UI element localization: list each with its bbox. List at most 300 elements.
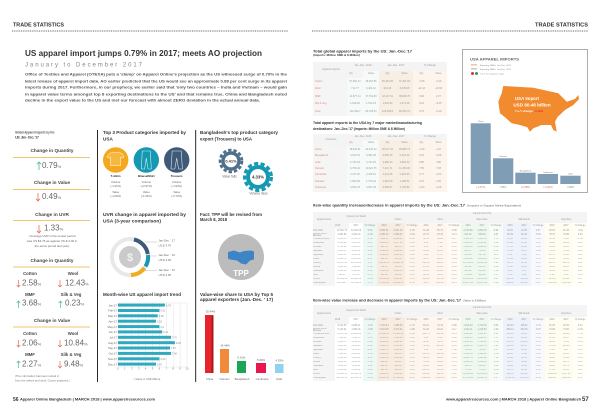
table: total global apparel imports: 56,194.05 bbox=[382, 80, 393, 82]
footer: right: 57 bbox=[582, 397, 589, 403]
axis labels: 10 bbox=[186, 366, 189, 370]
table: value by item: 220.48 bbox=[507, 345, 514, 347]
intro text: imports during 2017. Furthermore, in our prophecy, we earlier said that 'only two countries – India and Vietnam – would gain bbox=[25, 86, 287, 90]
category labels: Blouse/Shirt bbox=[138, 174, 155, 178]
table: value by item: -8.19 bbox=[535, 365, 541, 367]
table: quantity by item: 13,861.20 bbox=[463, 278, 473, 280]
table: value by item: -4.61 bbox=[409, 373, 415, 375]
source note: (The information has been sorted in bbox=[15, 374, 60, 378]
table: quantity by item: 1.25 bbox=[368, 242, 372, 244]
table: value by item: Total apparel bbox=[313, 377, 326, 379]
table: value by item: 2,142.60 bbox=[464, 337, 472, 339]
table: quantity by item: 0.65 bbox=[578, 234, 582, 236]
table: value by item: 7,520.18 bbox=[338, 337, 346, 339]
table: quantity by item: 14.60 bbox=[507, 258, 513, 260]
table: exports by destination: 29,194.12 bbox=[365, 148, 377, 151]
table: quantity by item: -6.83 bbox=[535, 246, 541, 248]
table: value by item: 28.14 bbox=[521, 369, 527, 371]
table: value by item: 51.32 bbox=[563, 357, 569, 359]
table: quantity by item: 6,838.12 bbox=[394, 238, 402, 240]
table: quantity by item: 641.22 bbox=[465, 234, 472, 236]
table: exports by destination: Jan.-Dec. 2017 bbox=[388, 135, 404, 138]
footer: left: 56 bbox=[13, 397, 19, 403]
table: quantity by item: 0.26 bbox=[536, 282, 540, 284]
table: quantity by item: 6,912.05 bbox=[380, 242, 388, 244]
table: quantity by item: 141.30 bbox=[381, 274, 388, 276]
table: quantity by item: 2,092.66 bbox=[478, 246, 486, 248]
table: value by item: 9.67 bbox=[564, 349, 568, 351]
country bar labels bbox=[478, 121, 574, 176]
table: value by item: Others bbox=[313, 373, 320, 375]
table: value by item: Silk blends bbox=[518, 313, 530, 315]
table: quantity by item: Underwear bbox=[313, 242, 324, 244]
table: total global apparel imports: % Change bbox=[424, 64, 436, 67]
table: quantity by item: 1,612.40 bbox=[478, 258, 486, 260]
table: quantity by item: 9,641.24 bbox=[394, 230, 402, 232]
table: value by item: % Change bbox=[449, 319, 459, 321]
table: value by item: 3,035.05 bbox=[436, 377, 444, 379]
table: value by item: -1.66 bbox=[493, 341, 499, 343]
table: value by item: 91.03 bbox=[549, 325, 555, 327]
table: quantity by item: 2.78 bbox=[536, 262, 540, 264]
table: quantity by item: % Change bbox=[407, 225, 417, 227]
month labels: Oct-17 bbox=[109, 352, 117, 356]
table: total global apparel imports: 0.79 bbox=[419, 110, 424, 112]
table: value by item: 5,248.60 bbox=[352, 345, 360, 347]
infographic title: USA APPAREL IMPORTS bbox=[470, 58, 520, 62]
category labels: (-1.91%) bbox=[110, 184, 121, 188]
table: value by item: 1.26 bbox=[578, 349, 582, 351]
table: quantity by item: 81.32 bbox=[563, 230, 569, 232]
table: quantity by item: 1,288.40 bbox=[394, 250, 402, 252]
table: quantity by item: 12.0 bbox=[536, 278, 540, 280]
table: quantity by item: 2017 bbox=[563, 225, 569, 227]
table: value by item: Cotton bbox=[395, 313, 401, 315]
table: value by item: -7.14 bbox=[451, 369, 457, 371]
table: value by item: 1,614.53 bbox=[464, 325, 472, 327]
heading: value table: (Value in $ Million) bbox=[463, 298, 486, 302]
table: exports by destination: 7,214.71 bbox=[383, 167, 392, 170]
heading: table 1: (Imports: Million SME & $ Million) bbox=[313, 53, 360, 57]
table: exports by destination: Qty bbox=[420, 141, 423, 144]
table: quantity by item: -5.18 bbox=[535, 238, 541, 240]
table: quantity by item: 2016 bbox=[549, 225, 555, 227]
table: value by item: -12.2 bbox=[451, 365, 457, 367]
table: value by item: -4.48 bbox=[367, 369, 373, 371]
table: value by item: -5.26 bbox=[409, 341, 415, 343]
table: value by item: -2.73 bbox=[535, 325, 541, 327]
table: value by item: 9,086.41 bbox=[352, 325, 360, 327]
table: value by item: 0.10 bbox=[578, 377, 582, 379]
category labels: T-shirts bbox=[111, 174, 121, 178]
table: value by item: 62.84 bbox=[521, 337, 527, 339]
table: quantity by item: 2016 bbox=[381, 225, 387, 227]
table: quantity by item: 0.50 bbox=[368, 230, 372, 232]
table: value by item: 714.25 bbox=[423, 345, 430, 347]
table: value by item: 10,112.40 bbox=[463, 373, 473, 375]
table: quantity by item: -2.29 bbox=[367, 234, 373, 236]
table: value by item: -11.7 bbox=[451, 329, 457, 331]
table: quantity by item: 9,236.18 bbox=[338, 242, 346, 244]
table: value by item: 48.72 bbox=[563, 365, 569, 367]
table: quantity by item: -12.7 bbox=[451, 238, 457, 240]
table: quantity by item: -0.38 bbox=[409, 254, 415, 256]
bar values: 6.02 bbox=[160, 310, 166, 313]
table: value by item: 7,212.64 bbox=[380, 325, 388, 327]
table: value by item: % Change bbox=[491, 319, 501, 321]
table: value by item: 262.30 bbox=[521, 329, 528, 331]
table: value by item: -4.76 bbox=[409, 353, 415, 355]
map label: Y-o-Y change: -0.49% bbox=[515, 109, 544, 113]
source note: from the values and wool, Cotton analyzed.) bbox=[15, 378, 70, 382]
axis labels: 5 bbox=[152, 366, 154, 370]
table: quantity by item: 2,193.80 bbox=[352, 270, 360, 272]
heading: value table: Item-wise value increase and decrease in apparel imports by the US: Jan.-Dec.'17 bbox=[313, 298, 461, 302]
table: quantity by item: 3,481.82 bbox=[338, 234, 346, 236]
value change by fibre: Cotton bbox=[23, 331, 37, 336]
table: value by item: 56.40 bbox=[437, 365, 443, 367]
table: quantity by item: % Change bbox=[491, 225, 501, 227]
table: value by item: -11.2 bbox=[451, 373, 457, 375]
table: quantity by item: -3.76 bbox=[367, 274, 373, 276]
quantity change by fibre: 3.68% bbox=[22, 298, 42, 308]
table: value by item: -0.41 bbox=[367, 325, 373, 327]
table: value by item: 6.03 bbox=[494, 365, 498, 367]
table: quantity by item: 30,317.90 bbox=[337, 262, 347, 264]
table: value by item: -1.10 bbox=[578, 337, 583, 339]
table: value by item: 0.91 bbox=[410, 365, 414, 367]
table: quantity by item: 55.73 bbox=[437, 230, 443, 232]
table: exports by destination: -0.58 bbox=[436, 154, 441, 157]
table: value by item: 5.94 bbox=[494, 345, 498, 347]
table: quantity by item: -2.58 bbox=[409, 282, 415, 284]
table: total global apparel imports: 624.18 bbox=[384, 87, 391, 90]
table: quantity by item: 3.18 bbox=[438, 242, 442, 244]
table: quantity by item: 2016 bbox=[423, 225, 429, 227]
month labels: Mar-17 bbox=[108, 314, 117, 318]
table: value by item: -2.93 bbox=[409, 361, 415, 363]
table: value by item: 1,141.52 bbox=[394, 341, 402, 343]
table: quantity by item: 79.38 bbox=[563, 238, 569, 240]
table: quantity by item: -10.2 bbox=[451, 270, 457, 272]
table: quantity by item: 2,142.55 bbox=[338, 270, 346, 272]
table: quantity by item: 56,194.05 bbox=[393, 282, 403, 284]
heading: quantity table bbox=[313, 204, 521, 208]
table: value by item: 2,318.41 bbox=[394, 345, 402, 347]
table: quantity by item: 16,240.53 bbox=[379, 262, 389, 264]
table: quantity by item: 43,417.61 bbox=[477, 282, 487, 284]
heading bbox=[103, 212, 186, 223]
table: exports by destination: 4,847.29 bbox=[366, 186, 376, 189]
table: quantity by item: % Change bbox=[449, 225, 459, 227]
table: quantity by item: 2017 bbox=[521, 225, 527, 227]
table: quantity by item: 2,204.53 bbox=[464, 242, 472, 244]
icon: jeans bbox=[134, 147, 159, 173]
table: quantity by item: -12.2 bbox=[451, 242, 457, 244]
heading: table 2: Total apparel exports to the USA by 7 major market/manufacturing bbox=[313, 121, 423, 125]
bar values bbox=[157, 304, 181, 366]
table: exports by destination: Bangladesh bbox=[315, 154, 328, 157]
orange rules bbox=[13, 158, 90, 327]
table: quantity by item: 8,692.53 bbox=[338, 238, 346, 240]
table: exports by destination: 5,361.22 bbox=[400, 154, 409, 157]
table: quantity by item: 16,018.12 bbox=[393, 262, 403, 264]
table: quantity by item: Knit shirts bbox=[313, 230, 323, 232]
table: value by item: 42.18 bbox=[423, 341, 429, 343]
table: quantity by item: -9.35 bbox=[451, 230, 457, 232]
table: value by item: 982.14 bbox=[381, 365, 388, 367]
table: quantity by item: -2.81 bbox=[409, 266, 415, 268]
table: quantity by item: Nightwear bbox=[313, 254, 323, 256]
table: total global apparel imports: 38,638.76 bbox=[399, 94, 410, 98]
table: value by item: 103.84 bbox=[507, 333, 514, 335]
table: value by item: 91.25 bbox=[563, 325, 569, 327]
quantity change by fibre: Silk & Veg bbox=[61, 292, 82, 297]
table: value by item: 50.88 bbox=[521, 361, 527, 363]
panel heading: US: Jan.- Dec. '17 bbox=[15, 136, 39, 140]
table: value by item: 1,712.40 bbox=[478, 325, 486, 327]
table: value by item: 4.88 bbox=[438, 337, 442, 339]
heading bbox=[200, 212, 262, 222]
country bar changes: 4.58% bbox=[567, 186, 575, 189]
table: value by item: -7.32 bbox=[451, 349, 457, 351]
table: total global apparel imports: MMF bbox=[315, 94, 321, 98]
table: quantity by item: 0.21 bbox=[578, 282, 582, 284]
table: exports by destination: 2.05 bbox=[436, 180, 441, 183]
month labels: Apr-17 bbox=[109, 319, 117, 323]
table: value by item: 1,000.00 bbox=[562, 377, 570, 379]
table: total global apparel imports: 38,097.65 bbox=[365, 80, 377, 82]
table: value by item: 514.72 bbox=[423, 353, 430, 355]
table: exports by destination: 3.24 bbox=[419, 180, 424, 183]
value change by fibre bbox=[17, 331, 88, 368]
table: value by item: -1.12 bbox=[578, 357, 583, 359]
table: value by item: Woven shirts/ bbox=[313, 328, 327, 330]
section headings: Change in UVR bbox=[35, 212, 70, 217]
bar values: 7.57 bbox=[171, 347, 176, 350]
table: quantity by item: 12.94 bbox=[437, 266, 443, 268]
country bar labels: China bbox=[478, 121, 484, 123]
table: quantity by item: 10.1 bbox=[494, 254, 498, 256]
table: exports by destination: 6.03 bbox=[419, 154, 424, 157]
table: value by item: 1.20 bbox=[494, 329, 498, 331]
table: quantity by item: Headwear bbox=[313, 270, 323, 272]
table: value by item: 2016 bbox=[549, 319, 555, 321]
table: value by item: 628.90 bbox=[437, 345, 444, 347]
table: value by item: 38.40 bbox=[507, 357, 513, 359]
table: quantity by item: 739.80 bbox=[479, 250, 486, 252]
map label: USA Import bbox=[515, 96, 540, 101]
table: value by item: 6,212.40 bbox=[394, 373, 402, 375]
table: value by item: 38,638.76 bbox=[477, 377, 487, 379]
table: value by item: -0.49 bbox=[367, 377, 373, 379]
table: exports by destination: India bbox=[315, 160, 320, 164]
table: quantity by item: 9.85 bbox=[508, 270, 512, 272]
table: exports by destination: 2,426.10 bbox=[366, 173, 376, 176]
table: quantity by item: 2016 bbox=[335, 225, 340, 227]
donut labels bbox=[158, 238, 175, 277]
table: value by item: 2,014.22 bbox=[352, 369, 360, 371]
table: value by item: -13.3 bbox=[451, 333, 457, 335]
table: value by item: 2.21 bbox=[368, 357, 372, 359]
table: value by item: -9.58 bbox=[451, 325, 457, 327]
panel: global apparel imports bbox=[13, 130, 90, 382]
table: value by item: 118.32 bbox=[521, 325, 527, 327]
table: value by item: 10,162.84 bbox=[477, 373, 487, 375]
table: value by item: 95.22 bbox=[521, 333, 527, 335]
heading: Bangladesh's top product category bbox=[200, 130, 278, 135]
table: exports by destination: 1,398.51 bbox=[400, 180, 409, 183]
table: quantity by item: -1.19 bbox=[493, 258, 499, 260]
table: value by item: 1,218.60 bbox=[478, 329, 486, 331]
gear labels bbox=[222, 174, 268, 196]
table: quantity by item: 3.62 bbox=[424, 242, 428, 244]
legend bbox=[471, 64, 512, 76]
table: quantity by item: 24,360.12 bbox=[351, 278, 361, 280]
value change by fibre: 9.48% bbox=[64, 360, 84, 368]
table: value by item: 72.41 bbox=[423, 361, 429, 363]
table: quantity by item: 376.54 bbox=[352, 274, 360, 276]
table: value by item: -2.64 bbox=[367, 353, 373, 355]
table: value by item: -10.8 bbox=[451, 377, 457, 379]
table: value by item: 18.05 bbox=[563, 369, 569, 371]
table: quantity by item: 1,190.64 bbox=[380, 254, 388, 256]
map label: USD 80.48 billion bbox=[513, 102, 551, 108]
axis labels: 8 bbox=[172, 366, 174, 370]
table: quantity by item: 6.10 bbox=[550, 274, 554, 276]
table: exports by destination: 8.58 bbox=[419, 160, 424, 164]
table: value by item: 79.42 bbox=[521, 353, 527, 355]
axis labels bbox=[117, 366, 189, 370]
table: value by item: Coats bbox=[313, 353, 319, 355]
section headings: Change in Quantity bbox=[31, 258, 74, 263]
table: value by item: 2016 bbox=[335, 319, 340, 321]
table: quantity by item: 45.06 bbox=[423, 250, 429, 252]
table: quantity by item: 7,024.67 bbox=[380, 238, 388, 240]
table: value by item: Trousers/Shorts bbox=[313, 333, 329, 335]
table: value by item: 744.90 bbox=[437, 369, 444, 371]
country bar labels: Bangladesh bbox=[520, 170, 532, 172]
table: value by item: 36.72 bbox=[437, 341, 443, 343]
table: value by item: 168.20 bbox=[521, 373, 528, 375]
category labels: (-0.44%) bbox=[141, 194, 152, 198]
table: quantity by item: 1.62 bbox=[578, 258, 582, 260]
table: value by item: -0.50 bbox=[493, 369, 499, 371]
table: quantity by item: 2.66 bbox=[578, 242, 582, 244]
table: quantity by item: 2016 bbox=[507, 225, 513, 227]
table: quantity by item: 31.83 bbox=[507, 238, 513, 240]
table: value by item: 48.64 bbox=[549, 353, 555, 355]
table: quantity by item: 2,681.35 bbox=[352, 246, 360, 248]
table: value by item: Suits bbox=[313, 369, 318, 371]
bar values: 7.66 bbox=[172, 353, 177, 356]
table: value by item: 2017 bbox=[437, 319, 443, 321]
panel: Bangladesh top export bbox=[200, 130, 278, 196]
quantity change by fibre: Cotton bbox=[23, 271, 37, 276]
table: total global apparel imports: Jan.-Dec. 2017 bbox=[388, 64, 404, 67]
table: quantity by item: -1.48 bbox=[367, 266, 373, 268]
table: value by item: 17.15 bbox=[549, 369, 555, 371]
table: quantity by item: 1.17 bbox=[494, 274, 498, 276]
table: quantity by item: 6.57 bbox=[536, 230, 540, 232]
legend: Y-o-Y % change in value bbox=[480, 74, 505, 76]
axis labels: 1 bbox=[124, 366, 126, 370]
table: quantity by item: Gloves bbox=[313, 266, 320, 268]
table: value by item: 802.15 bbox=[423, 369, 430, 371]
table: exports by destination: -2.28 bbox=[436, 186, 441, 189]
table: quantity by item: -1.37 bbox=[409, 262, 415, 264]
table: exports by destination: 2,014.35 bbox=[383, 173, 392, 176]
table: quantity by item: 14.9 bbox=[578, 262, 582, 264]
table: total global apparel imports: 3,035.05 bbox=[400, 87, 409, 90]
section headings: Change in Value bbox=[34, 180, 70, 185]
table: value by item: 9.55 bbox=[550, 349, 554, 351]
table: quantity by item: 2,734.61 bbox=[338, 246, 346, 248]
table: quantity by item: -0.50 bbox=[409, 242, 415, 244]
category labels: Volume bbox=[172, 180, 182, 184]
UVR note: ( Average UVR in the review period bbox=[29, 234, 76, 238]
table: value by item: 774.32 bbox=[465, 369, 472, 371]
table: quantity by item: 47.12 bbox=[507, 246, 513, 248]
bar values: 6.08 bbox=[160, 358, 166, 361]
table: value by item: Gloves bbox=[313, 361, 320, 363]
table: value by item: 2.69 bbox=[368, 349, 372, 351]
table: exports by destination: Vietnam bbox=[315, 167, 324, 170]
table: value by item: 13,842.05 bbox=[379, 333, 389, 335]
table: value by item: 2,318.66 bbox=[394, 357, 402, 359]
table: value by item: Imports from USA bbox=[473, 307, 491, 309]
table: quantity by item: 10,040.88 bbox=[379, 278, 389, 280]
heading: Top 3 Product categories imported by bbox=[103, 130, 186, 135]
heading: apparel exporters (Jan.-Dec. ' 17) bbox=[200, 297, 273, 302]
column dividers bbox=[98, 130, 196, 382]
table: value by item: 5,398.24 bbox=[478, 353, 486, 355]
table: quantity by item: 30,762.44 bbox=[351, 262, 361, 264]
table: quantity by item: 3.76 bbox=[494, 238, 498, 240]
table: quantity by item: 14.35 bbox=[423, 266, 429, 268]
table: value by item: 9,124.05 bbox=[338, 325, 346, 327]
table: value by item: 7,632.74 bbox=[352, 337, 360, 339]
table: quantity by item: 91.80 bbox=[549, 242, 555, 244]
table: value by item: 15,930.24 bbox=[351, 333, 361, 335]
table: value by item: -14.0 bbox=[535, 369, 541, 371]
panel: top 3 product categories bbox=[103, 130, 189, 198]
category labels: Volume bbox=[142, 180, 151, 184]
table: total global apparel imports: 37,311.82 bbox=[399, 80, 410, 82]
table: quantity by item: -8.01 bbox=[535, 250, 541, 252]
table: total global apparel imports: -2.06 bbox=[436, 80, 441, 82]
table: total global apparel imports: Value bbox=[401, 72, 408, 75]
table: value by item: 594.22 bbox=[395, 361, 402, 363]
table: quantity by item: -9.83 bbox=[451, 266, 457, 268]
table: quantity by item: 356.22 bbox=[563, 278, 570, 280]
table: quantity by item: 1,520.38 bbox=[380, 270, 388, 272]
table: quantity by item: -4.70 bbox=[409, 278, 415, 280]
donut labels: Jan-Dec. ' 16 bbox=[158, 253, 175, 257]
table: value by item: -8.97 bbox=[535, 329, 541, 331]
table: quantity by item: -1.05 bbox=[493, 246, 499, 248]
table: quantity by item: -0.18 bbox=[493, 266, 499, 268]
UVR note bbox=[27, 234, 78, 248]
table: value by item: 5.25 bbox=[578, 369, 582, 371]
overall change figures: 0.79% bbox=[42, 161, 62, 170]
icon: t-shirt bbox=[103, 147, 128, 173]
table: value by item: -19.2 bbox=[535, 353, 541, 355]
table: value by item: -1.77 bbox=[367, 333, 373, 335]
table: quantity by item: 133.88 bbox=[395, 274, 402, 276]
table: value by item: 520.30 bbox=[479, 365, 486, 367]
table: quantity by item: 3.22 bbox=[578, 270, 582, 272]
